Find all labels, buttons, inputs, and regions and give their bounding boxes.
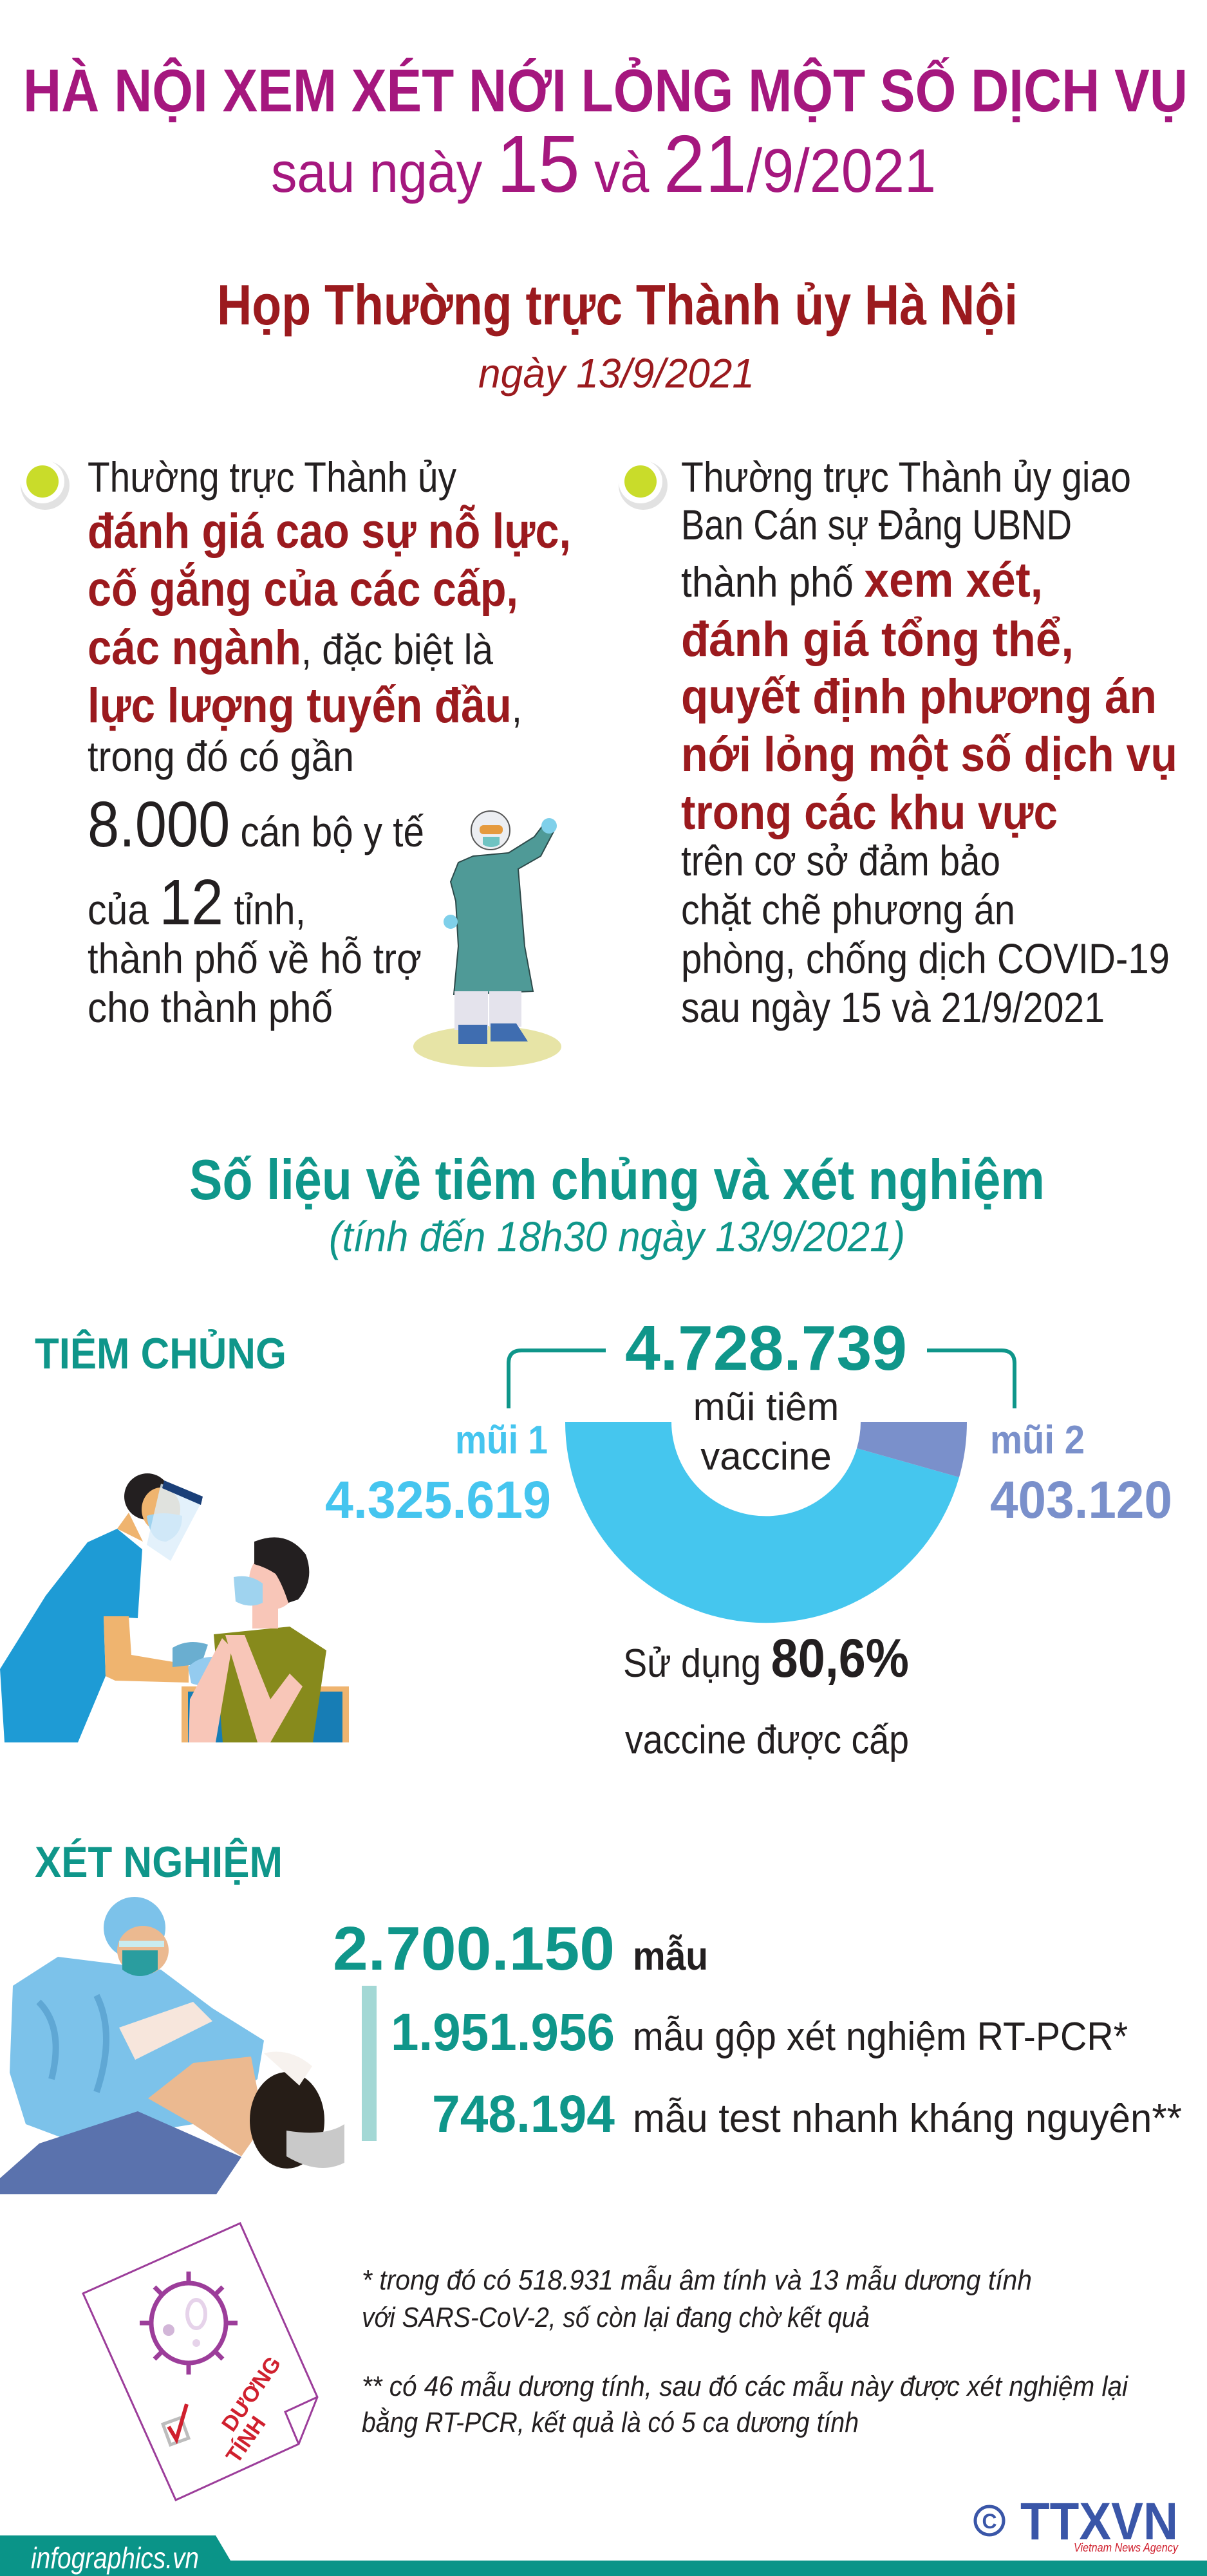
chart: vaccine dose donut with bracket: mũi tiêm [693, 1385, 839, 1428]
logo: TTXVN: TTXVN [1020, 2492, 1178, 2551]
text block left: đánh giá cao sự nỗ lực, [88, 504, 571, 559]
icon: vaccination illustration [0, 1473, 349, 1742]
text block left: thành phố về hỗ trợ [88, 935, 422, 982]
panel: right bullet [619, 453, 1177, 1031]
text block left: 8.000 cán bộ y tế [88, 789, 424, 861]
text block right: chặt chẽ phương án [681, 886, 1015, 933]
text block: footnotes [362, 2264, 1128, 2438]
icon: health worker in protective gown [413, 811, 561, 1067]
chart: vaccine dose donut with bracket: 4.728.739 [625, 1312, 907, 1383]
icon: positive test document [83, 2223, 317, 2500]
chart: testing numbers: mẫu test nhanh kháng nguyên** [633, 2096, 1182, 2141]
logo: TTXVN: Vietnam News Agency [1074, 2541, 1179, 2554]
text block left: của 12 tỉnh, [88, 866, 306, 938]
text block left [88, 453, 571, 1031]
chart: testing numbers: mẫu gộp xét nghiệm RT-PCR* [633, 2015, 1128, 2059]
text block right: Thường trực Thành ủy giao [681, 453, 1131, 501]
text block left: lực lượng tuyến đầu, [88, 678, 522, 733]
chart: testing numbers: mẫu [633, 1934, 708, 1979]
icon: bullet right [619, 460, 668, 510]
chart: testing numbers: 2.700.150 [333, 1914, 615, 1983]
text block right [681, 453, 1177, 1031]
chart: vaccine dose donut with bracket: vaccine [700, 1435, 832, 1478]
heading: meeting: ngày 13/9/2021 [478, 350, 754, 397]
heading: statistics: Số liệu về tiêm chủng và xét nghiệm [189, 1148, 1045, 1211]
chart: testing numbers: 748.194 [432, 2085, 615, 2143]
icon: positive test document: DƯƠNG [217, 2352, 286, 2436]
text block left: Thường trực Thành ủy [88, 453, 456, 501]
footer band [0, 2535, 1207, 2576]
heading: meeting [217, 273, 1018, 397]
text block: footnotes: * trong đó có 518.931 mẫu âm tính và 13 mẫu dương tính [362, 2264, 1032, 2296]
text block right: Ban Cán sự Đảng UBND [681, 501, 1072, 548]
heading: statistics [189, 1148, 1045, 1260]
text block: footnotes: bằng RT-PCR, kết quả là có 5 ca dương tính [362, 2407, 859, 2438]
icon: bullet left [21, 460, 70, 510]
text block left: cố gắng của các cấp, [88, 562, 518, 617]
callout: usage rate: vaccine được cấp [625, 1718, 909, 1762]
text block right: quyết định phương án [681, 669, 1157, 724]
text block left: trong đó có gần [88, 733, 354, 780]
title [23, 57, 1188, 209]
text block: footnotes: ** có 46 mẫu dương tính, sau đó các mẫu này được xét nghiệm lại [362, 2371, 1128, 2402]
legend: dose 1: mũi 1 [455, 1418, 548, 1462]
chart: testing numbers: 1.951.956 [391, 2003, 615, 2062]
footer band: infographics.vn [31, 2541, 199, 2575]
text block right: thành phố xem xét, [681, 553, 1043, 608]
heading: vaccination: TIÊM CHỦNG [35, 1329, 286, 1378]
chart: testing numbers [333, 1914, 1182, 2143]
chart: vaccine dose donut with bracket [325, 1312, 1172, 1623]
legend: dose 2 [990, 1418, 1172, 1529]
legend: dose 2: mũi 2 [990, 1418, 1085, 1462]
text block: footnotes: với SARS-CoV-2, số còn lại đang chờ kết quả [362, 2302, 870, 2333]
heading: meeting: Họp Thường trực Thành ủy Hà Nội [217, 273, 1018, 337]
logo: TTXVN: C [982, 2510, 997, 2533]
legend: dose 1 [325, 1418, 551, 1529]
text block right: sau ngày 15 và 21/9/2021 [681, 984, 1105, 1031]
text block right: trên cơ sở đảm bảo [681, 837, 1000, 884]
callout: usage rate: Sử dụng 80,6% [623, 1628, 909, 1688]
legend: dose 2: 403.120 [990, 1471, 1172, 1529]
logo: TTXVN [975, 2492, 1179, 2554]
icon: testing illustration [0, 1897, 344, 2194]
icon: positive test document: TÍNH [221, 2412, 270, 2468]
text block right: trong các khu vực [681, 785, 1058, 840]
text block left: cho thành phố [88, 984, 333, 1031]
text block right: đánh giá tổng thể, [681, 612, 1074, 667]
legend: dose 1: 4.325.619 [325, 1471, 551, 1529]
text block left: các ngành, đặc biệt là [88, 621, 493, 675]
title: sau ngày 15 và 21/9/2021 [271, 118, 936, 209]
heading: testing: XÉT NGHIỆM [35, 1837, 283, 1887]
heading: statistics: (tính đến 18h30 ngày 13/9/2021) [329, 1213, 905, 1260]
panel: left bullet [21, 453, 571, 1031]
callout: usage rate [623, 1628, 909, 1762]
